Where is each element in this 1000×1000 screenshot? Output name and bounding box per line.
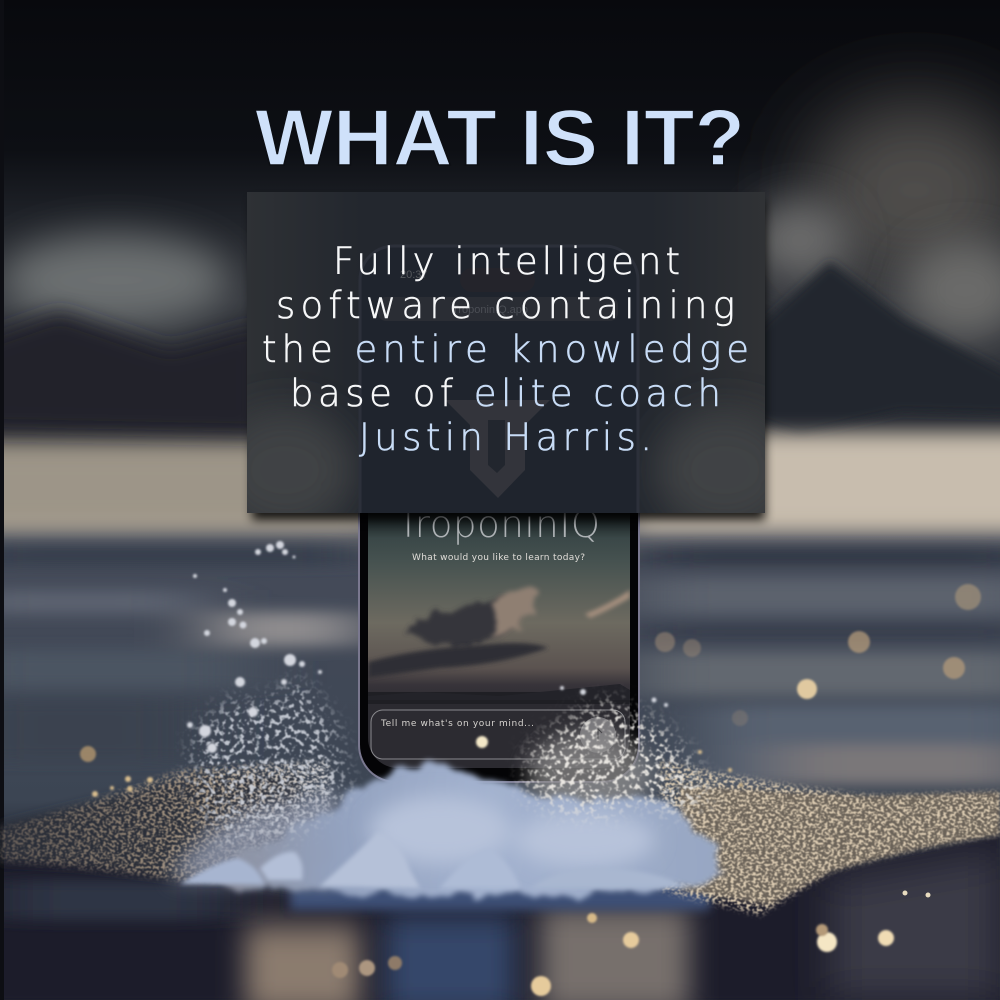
line 3: the entire knowledge — [262, 328, 749, 371]
panel glow right — [646, 405, 765, 513]
splash speckle left — [190, 680, 350, 845]
phone: screen wallpaper — [368, 500, 630, 768]
sky: dark mountain right — [755, 262, 1000, 435]
phone: bezel — [360, 245, 638, 781]
sand base left — [0, 775, 300, 880]
sand speckle left — [0, 760, 330, 880]
phone ghost: body — [360, 246, 638, 546]
foam left glow — [170, 790, 340, 885]
sky: dark mountain left — [0, 312, 260, 435]
panel background — [247, 192, 765, 513]
splash warm drops — [92, 750, 743, 797]
phone ghost: address bar — [378, 297, 618, 321]
water: banded surface — [0, 545, 1000, 785]
phone ghost behind panel — [360, 246, 638, 546]
splash speckle right — [525, 700, 715, 815]
phone: wallpaper clouds — [405, 596, 525, 646]
line 5: Justin Harris. — [359, 416, 652, 459]
sky: pale cloud right — [805, 100, 1000, 280]
bokeh lights — [80, 584, 981, 996]
phone: send arrow — [594, 729, 602, 742]
splash base right — [528, 733, 652, 817]
water: left foreground ripple — [0, 880, 230, 920]
phone ghost: logo notch — [488, 420, 505, 473]
phone ghost: status time: 20:37 — [400, 269, 428, 281]
panel: description — [244, 192, 773, 528]
sky: grey haze right of mountain — [905, 240, 1000, 340]
sky: pale cloud left — [0, 234, 230, 326]
phone ghost: logo — [445, 400, 550, 498]
phone ghost: notch — [460, 268, 535, 292]
water: right foreground haze — [830, 850, 1000, 1000]
foam mound — [210, 765, 725, 898]
water: reflection under foam — [245, 905, 690, 1000]
line 2: software containing — [276, 284, 735, 327]
panel shadow — [252, 200, 765, 520]
panel glow left — [247, 404, 358, 513]
foam mounds — [180, 832, 690, 888]
water: foam blue band — [290, 885, 710, 910]
foam and splash — [0, 541, 1000, 915]
water: dark foreground — [0, 835, 1000, 1000]
sand base right — [680, 785, 1000, 905]
sand speckle right — [660, 760, 1000, 915]
splash drops — [187, 541, 668, 753]
phone: send button — [580, 717, 616, 753]
phone: input box — [371, 710, 625, 759]
horizon: warm band — [0, 435, 1000, 527]
panel: soft scene glow lower corners — [247, 404, 765, 513]
description text — [262, 240, 749, 459]
sky: grey haze near panel — [750, 200, 850, 280]
phone — [358, 513, 640, 783]
phone: input placeholder: Tell me what's on your mind... — [380, 719, 534, 729]
line 1: Fully intelligent — [333, 240, 680, 283]
phone: app name: TroponinIQ — [397, 503, 600, 546]
title: WHAT IS IT? — [255, 93, 745, 182]
line 4: base of elite coach — [290, 372, 721, 415]
foam cloud highlights — [370, 796, 655, 868]
phone ghost: address text: TroponinIQ.app — [452, 304, 528, 316]
phone: prompt line: What would you like to learn today? — [412, 553, 585, 563]
phone: frame — [358, 243, 640, 783]
